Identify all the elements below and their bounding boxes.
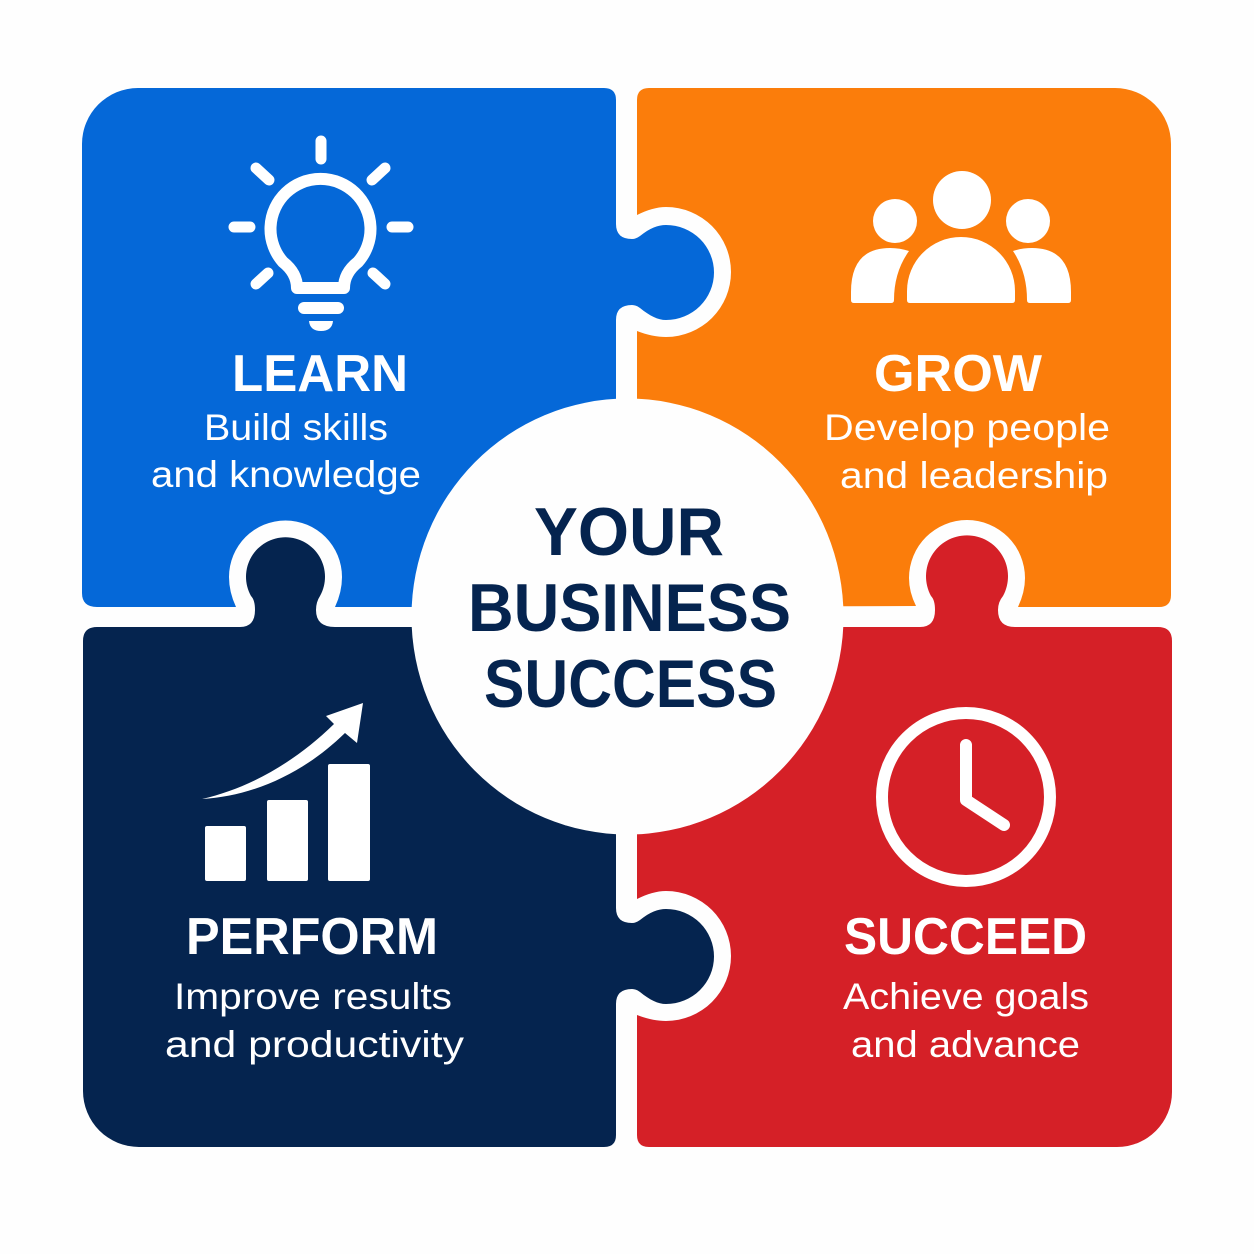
center circle: [412, 398, 844, 834]
text: succeed description: and advance: [851, 1024, 1080, 1065]
panel: perform: [83, 537, 714, 1147]
heading: learn: LEARN: [232, 345, 408, 403]
icon: people: [851, 171, 1071, 303]
text: grow description: and leadership: [840, 455, 1108, 496]
title: BUSINESS: [468, 570, 791, 646]
heading: succeed: SUCCEED: [844, 908, 1087, 966]
text: succeed description: Achieve goals: [843, 976, 1089, 1017]
text: perform description: Improve results: [174, 976, 452, 1017]
title: YOUR: [534, 494, 724, 570]
icon: bar chart with arrow: [202, 703, 370, 881]
panel: grow: [637, 88, 1171, 607]
icon: clock: [882, 713, 1050, 881]
puzzle piece: red: [637, 535, 1172, 1147]
icon: light bulb: [234, 141, 408, 331]
text: learn description: Build skills: [204, 407, 388, 448]
heading: perform: PERFORM: [186, 908, 438, 966]
puzzle piece: orange: [637, 88, 1171, 607]
title: SUCCESS: [484, 646, 777, 722]
circle background: [412, 398, 844, 834]
text: grow description: Develop people: [824, 407, 1110, 448]
text: learn description: and knowledge: [151, 454, 421, 495]
text: perform description: and productivity: [165, 1024, 465, 1065]
panel: succeed: [637, 535, 1172, 1147]
puzzle piece: blue: [82, 88, 714, 607]
puzzle piece: navy: [83, 537, 714, 1147]
panel: learn: [82, 88, 714, 607]
heading: grow: GROW: [874, 345, 1043, 403]
